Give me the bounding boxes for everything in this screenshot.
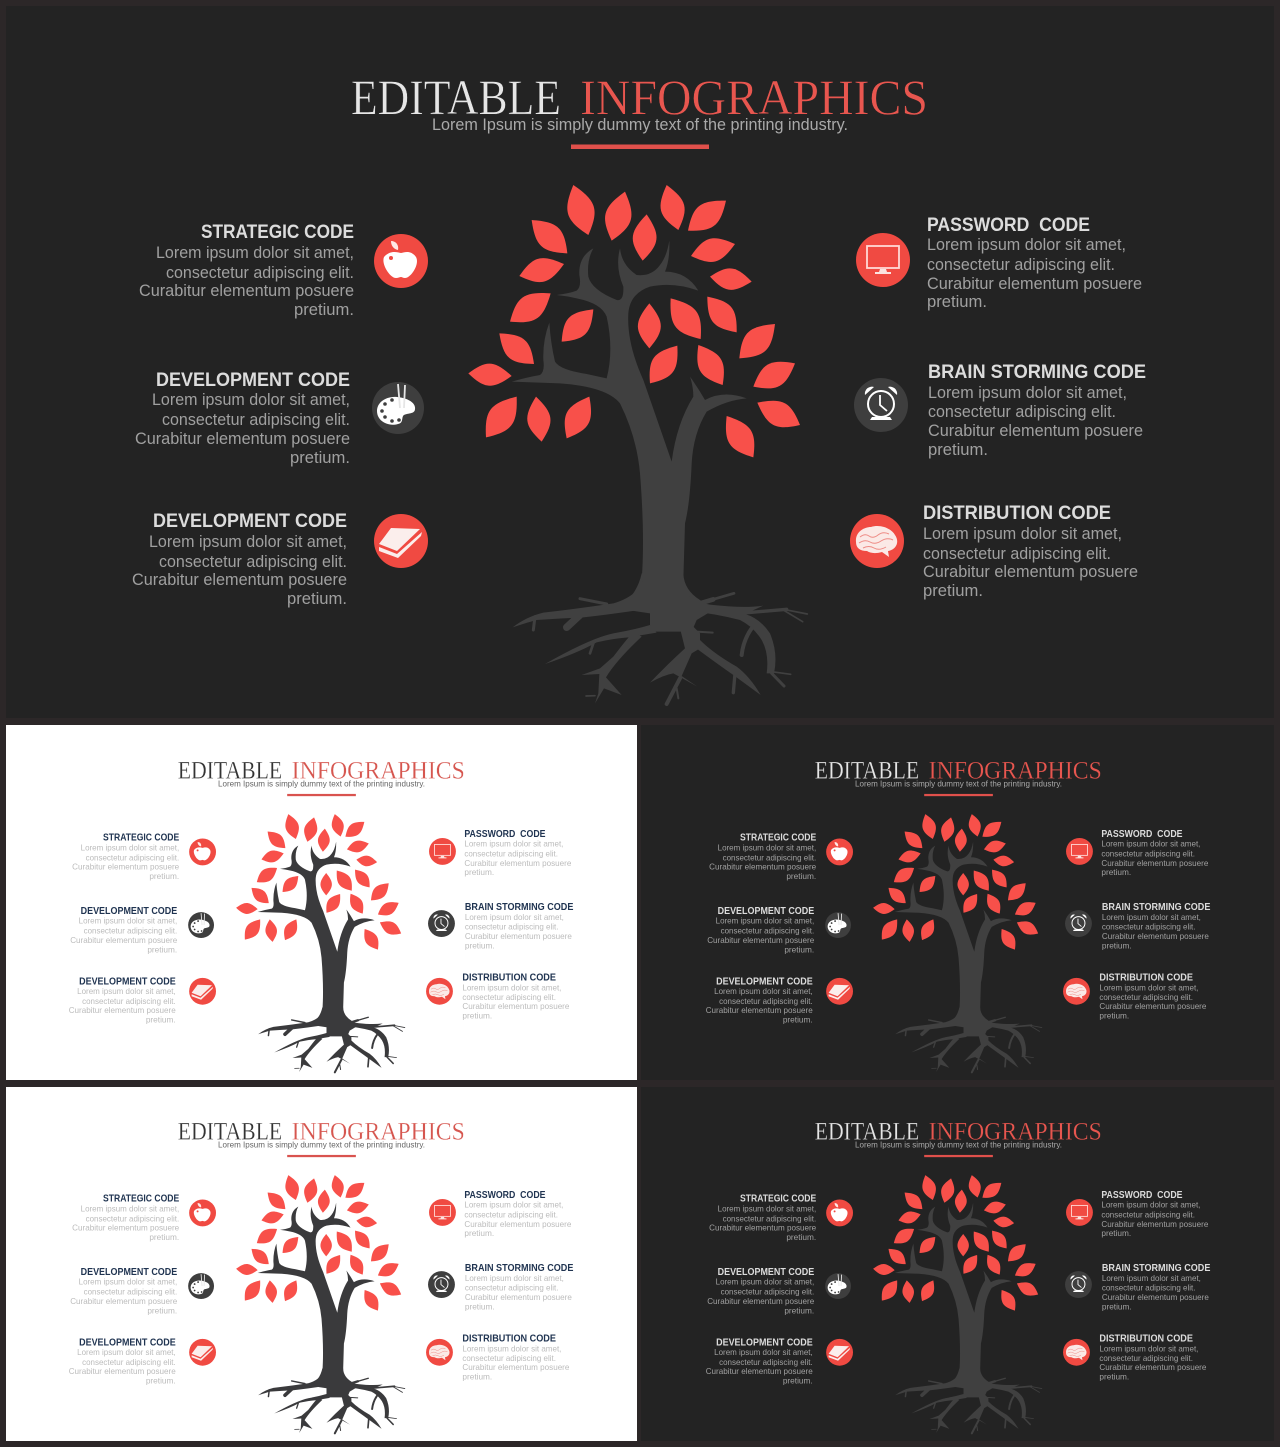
item: development code xyxy=(70,906,214,954)
item: development code: Lorem ipsum dolor sit amet, xyxy=(77,986,176,996)
item: brain storming code xyxy=(1065,902,1211,950)
icon: brain xyxy=(1063,1339,1090,1366)
item: distribution code xyxy=(850,502,1138,600)
item: distribution code: pretium. xyxy=(1099,1372,1129,1382)
item: development code: consectetur adipiscing elit. xyxy=(84,1287,177,1297)
icon: monitor xyxy=(1066,838,1093,865)
item: password code: consectetur adipiscing elit. xyxy=(1101,848,1195,858)
item: strategic code: consectetur adipiscing elit. xyxy=(86,852,179,862)
item: password code xyxy=(856,214,1142,311)
item: strategic code: Lorem ipsum dolor sit amet, xyxy=(718,1203,816,1213)
item: development code: consectetur adipiscing elit. xyxy=(84,926,177,936)
item: development code xyxy=(135,369,424,467)
item: brain storming code: Lorem ipsum dolor sit amet, xyxy=(928,383,1127,402)
item: development code: pretium. xyxy=(784,1305,814,1315)
item: brain storming code xyxy=(428,1263,574,1311)
item: development code: DEVELOPMENT CODE xyxy=(716,976,813,987)
item: strategic code: pretium. xyxy=(294,300,354,319)
item: strategic code: Curabitur elementum posuere xyxy=(709,1222,816,1232)
item: password code: Curabitur elementum posuere xyxy=(464,1219,572,1229)
item: distribution code: pretium. xyxy=(462,1372,492,1382)
item: strategic code xyxy=(72,832,216,881)
item: development code: DEVELOPMENT CODE xyxy=(79,976,176,987)
title: INFOGRAPHICS xyxy=(292,1119,465,1146)
item: password code: Curabitur elementum posuere xyxy=(927,274,1142,293)
item: distribution code xyxy=(426,972,570,1021)
icon: apple xyxy=(374,234,428,288)
title xyxy=(351,69,928,125)
item: development code xyxy=(706,976,853,1025)
item: development code: Lorem ipsum dolor sit amet, xyxy=(714,986,813,996)
item: development code: Lorem ipsum dolor sit amet, xyxy=(79,1277,177,1287)
item: development code: Lorem ipsum dolor sit amet, xyxy=(79,916,177,926)
item: distribution code: pretium. xyxy=(462,1011,492,1021)
icon: apple xyxy=(189,1199,216,1226)
item: password code: PASSWORD CODE xyxy=(464,829,546,840)
item: development code: Curabitur elementum posuere xyxy=(70,935,177,945)
item: password code: consectetur adipiscing elit. xyxy=(927,255,1115,274)
item: development code: consectetur adipiscing elit. xyxy=(82,996,176,1006)
item: brain storming code: consectetur adipiscing elit. xyxy=(1102,1283,1195,1293)
item: distribution code: Lorem ipsum dolor sit amet, xyxy=(1099,1343,1198,1353)
item: password code: Lorem ipsum dolor sit amet, xyxy=(927,235,1126,254)
item: strategic code: Curabitur elementum posuere xyxy=(139,281,354,300)
item: distribution code: DISTRIBUTION CODE xyxy=(462,1333,556,1344)
item: development code: Lorem ipsum dolor sit amet, xyxy=(149,532,347,551)
item: development code: consectetur adipiscing elit. xyxy=(721,926,814,936)
item: strategic code: Curabitur elementum posuere xyxy=(72,1222,179,1232)
tree illustration xyxy=(873,1173,1042,1433)
item: development code xyxy=(69,976,216,1025)
item: brain storming code: BRAIN STORMING CODE xyxy=(465,1263,574,1274)
item: development code: DEVELOPMENT CODE xyxy=(153,510,347,532)
title underline xyxy=(924,794,993,796)
item: distribution code xyxy=(1063,972,1207,1021)
item: password code: Curabitur elementum posuere xyxy=(1101,858,1209,868)
item: development code: consectetur adipiscing elit. xyxy=(162,410,350,429)
tree illustration xyxy=(468,181,807,704)
item: development code: Curabitur elementum posuere xyxy=(70,1296,177,1306)
item: development code xyxy=(707,1267,851,1315)
item: development code: consectetur adipiscing elit. xyxy=(719,996,813,1006)
icon: palette xyxy=(188,1273,214,1299)
item: strategic code: pretium. xyxy=(786,871,816,881)
subtitle: Lorem Ipsum is simply dummy text of the printing industry. xyxy=(218,1140,425,1150)
item: brain storming code: Curabitur elementum posuere xyxy=(465,1292,572,1302)
title: EDITABLE xyxy=(815,1119,919,1146)
item: brain storming code: pretium. xyxy=(928,440,988,459)
item: strategic code xyxy=(709,1193,853,1242)
item: password code: Curabitur elementum posuere xyxy=(464,858,572,868)
item: development code: pretium. xyxy=(783,1015,813,1025)
item: development code: DEVELOPMENT CODE xyxy=(81,906,178,917)
title: INFOGRAPHICS xyxy=(292,758,465,785)
item: development code: Curabitur elementum posuere xyxy=(132,570,347,589)
subtitle: Lorem Ipsum is simply dummy text of the printing industry. xyxy=(432,115,848,134)
icon: brain xyxy=(1063,978,1090,1005)
item: development code: consectetur adipiscing elit. xyxy=(82,1357,176,1367)
item: brain storming code: BRAIN STORMING CODE xyxy=(1102,902,1211,913)
item: password code: Lorem ipsum dolor sit amet, xyxy=(1101,1199,1200,1209)
item: distribution code: consectetur adipiscing elit. xyxy=(923,544,1111,563)
item: development code: DEVELOPMENT CODE xyxy=(79,1337,176,1348)
item: brain storming code: Lorem ipsum dolor sit amet, xyxy=(465,1273,564,1283)
item: distribution code: Curabitur elementum posuere xyxy=(462,1001,570,1011)
title xyxy=(178,758,465,785)
item: password code: pretium. xyxy=(464,867,494,877)
title underline xyxy=(924,1155,993,1157)
icon: brain xyxy=(426,1339,453,1366)
icon: book xyxy=(189,978,216,1005)
item: distribution code: Lorem ipsum dolor sit amet, xyxy=(923,524,1122,543)
item: strategic code: Lorem ipsum dolor sit amet, xyxy=(718,842,816,852)
item: development code: Curabitur elementum posuere xyxy=(707,935,814,945)
icon: book xyxy=(374,514,428,568)
item: brain storming code xyxy=(854,361,1146,459)
item: brain storming code: Curabitur elementum posuere xyxy=(1102,1292,1209,1302)
item: development code: Curabitur elementum posuere xyxy=(135,429,350,448)
item: strategic code: consectetur adipiscing elit. xyxy=(86,1213,179,1223)
item: development code: DEVELOPMENT CODE xyxy=(156,369,350,391)
icon: book xyxy=(189,1339,216,1366)
item: password code: Curabitur elementum posuere xyxy=(1101,1219,1209,1229)
panel: main dark slide xyxy=(132,69,1146,704)
item: brain storming code: pretium. xyxy=(1102,940,1132,950)
title: INFOGRAPHICS xyxy=(580,69,928,125)
item: password code: consectetur adipiscing elit. xyxy=(1101,1209,1195,1219)
title xyxy=(815,758,1102,785)
item: strategic code: pretium. xyxy=(149,1232,179,1242)
item: strategic code: STRATEGIC CODE xyxy=(103,832,180,843)
item: password code: consectetur adipiscing elit. xyxy=(464,848,558,858)
item: distribution code: consectetur adipiscing elit. xyxy=(462,992,556,1002)
item: brain storming code: BRAIN STORMING CODE xyxy=(928,361,1146,383)
item: brain storming code: Lorem ipsum dolor sit amet, xyxy=(1102,912,1201,922)
item: password code: Lorem ipsum dolor sit amet, xyxy=(464,1199,563,1209)
subtitle: Lorem Ipsum is simply dummy text of the printing industry. xyxy=(218,779,425,789)
item: password code: pretium. xyxy=(1101,867,1131,877)
item: password code xyxy=(1066,829,1209,877)
subtitle: Lorem Ipsum is simply dummy text of the printing industry. xyxy=(855,779,1062,789)
item: strategic code xyxy=(139,221,428,319)
item: development code: DEVELOPMENT CODE xyxy=(81,1267,178,1278)
item: strategic code: Lorem ipsum dolor sit amet, xyxy=(156,243,354,262)
item: password code: PASSWORD CODE xyxy=(927,214,1090,236)
item: distribution code: Lorem ipsum dolor sit amet, xyxy=(1099,982,1198,992)
icon: monitor xyxy=(429,838,456,865)
title xyxy=(178,1119,465,1146)
item: distribution code: DISTRIBUTION CODE xyxy=(462,972,556,983)
item: strategic code: consectetur adipiscing elit. xyxy=(723,1213,816,1223)
item: distribution code: Lorem ipsum dolor sit amet, xyxy=(462,1343,561,1353)
item: password code: Lorem ipsum dolor sit amet, xyxy=(1101,838,1200,848)
title underline xyxy=(571,144,709,149)
tree illustration xyxy=(236,812,405,1072)
item: development code: pretium. xyxy=(287,589,347,608)
item: password code: PASSWORD CODE xyxy=(1101,829,1183,840)
item: brain storming code: consectetur adipiscing elit. xyxy=(928,402,1116,421)
item: development code: Curabitur elementum posuere xyxy=(69,1005,176,1015)
item: password code: Lorem ipsum dolor sit amet, xyxy=(464,838,563,848)
icon: palette xyxy=(188,912,214,938)
item: brain storming code xyxy=(428,902,574,950)
icon: brain xyxy=(850,514,904,568)
item: brain storming code: pretium. xyxy=(465,1301,495,1311)
panel: white slide 2 background xyxy=(6,1087,637,1441)
panel: dark slide 2 xyxy=(706,1119,1211,1433)
item: development code xyxy=(70,1267,214,1315)
item: strategic code: consectetur adipiscing elit. xyxy=(166,263,354,282)
item: strategic code: STRATEGIC CODE xyxy=(201,221,354,243)
item: development code: DEVELOPMENT CODE xyxy=(718,1267,815,1278)
panel: main dark slide background xyxy=(6,6,1274,718)
item: development code xyxy=(707,906,851,954)
title: INFOGRAPHICS xyxy=(929,758,1102,785)
item: strategic code: Lorem ipsum dolor sit amet, xyxy=(81,842,179,852)
title: EDITABLE xyxy=(815,758,919,785)
icon: alarm clock xyxy=(428,910,455,937)
item: distribution code: DISTRIBUTION CODE xyxy=(923,502,1111,524)
item: distribution code: Curabitur elementum posuere xyxy=(1099,1001,1207,1011)
item: password code xyxy=(429,829,572,877)
item: strategic code xyxy=(709,832,853,881)
item: password code: consectetur adipiscing elit. xyxy=(464,1209,558,1219)
item: distribution code: Curabitur elementum posuere xyxy=(1099,1362,1207,1372)
item: development code: consectetur adipiscing elit. xyxy=(719,1357,813,1367)
item: brain storming code: pretium. xyxy=(1102,1301,1132,1311)
item: brain storming code: pretium. xyxy=(465,940,495,950)
item: password code: PASSWORD CODE xyxy=(1101,1190,1183,1201)
icon: alarm clock xyxy=(1065,910,1092,937)
subtitle: Lorem Ipsum is simply dummy text of the printing industry. xyxy=(855,1140,1062,1150)
item: development code: pretium. xyxy=(784,944,814,954)
icon: apple xyxy=(826,838,853,865)
item: development code xyxy=(706,1337,853,1386)
item: strategic code: Curabitur elementum posuere xyxy=(709,861,816,871)
item: development code: Lorem ipsum dolor sit amet, xyxy=(714,1347,813,1357)
panel: dark slide 1 background xyxy=(641,725,1274,1080)
title: INFOGRAPHICS xyxy=(929,1119,1102,1146)
item: brain storming code: Lorem ipsum dolor sit amet, xyxy=(465,912,564,922)
item: strategic code: Lorem ipsum dolor sit amet, xyxy=(81,1203,179,1213)
item: strategic code: consectetur adipiscing elit. xyxy=(723,852,816,862)
item: distribution code: Curabitur elementum posuere xyxy=(462,1362,570,1372)
panel: white slide 1 xyxy=(69,758,574,1072)
icon: alarm clock xyxy=(1065,1271,1092,1298)
item: development code: DEVELOPMENT CODE xyxy=(718,906,815,917)
item: development code: pretium. xyxy=(147,944,177,954)
item: distribution code: pretium. xyxy=(923,581,983,600)
icon: apple xyxy=(189,838,216,865)
item: distribution code: consectetur adipiscing elit. xyxy=(1099,992,1193,1002)
tree illustration xyxy=(873,812,1042,1072)
title underline xyxy=(287,794,356,796)
item: development code: pretium. xyxy=(146,1015,176,1025)
item: development code: Lorem ipsum dolor sit amet, xyxy=(77,1347,176,1357)
item: strategic code: Curabitur elementum posuere xyxy=(72,861,179,871)
panel: white slide 1 background xyxy=(6,725,637,1080)
item: development code: Curabitur elementum posuere xyxy=(69,1366,176,1376)
item: strategic code: STRATEGIC CODE xyxy=(740,1193,817,1204)
item: strategic code: STRATEGIC CODE xyxy=(740,832,817,843)
item: development code: pretium. xyxy=(290,448,350,467)
item: brain storming code: consectetur adipiscing elit. xyxy=(465,1283,558,1293)
item: development code: Lorem ipsum dolor sit amet, xyxy=(716,1277,814,1287)
item: development code xyxy=(132,510,428,608)
item: password code: pretium. xyxy=(464,1228,494,1238)
item: password code: PASSWORD CODE xyxy=(464,1190,546,1201)
item: distribution code: DISTRIBUTION CODE xyxy=(1099,972,1193,983)
item: brain storming code xyxy=(1065,1263,1211,1311)
icon: palette xyxy=(825,1273,851,1299)
item: distribution code xyxy=(426,1333,570,1382)
item: development code: pretium. xyxy=(146,1376,176,1386)
title: EDITABLE xyxy=(351,69,561,125)
item: distribution code: Lorem ipsum dolor sit amet, xyxy=(462,982,561,992)
item: brain storming code: consectetur adipiscing elit. xyxy=(465,922,558,932)
icon: book xyxy=(826,1339,853,1366)
icon: monitor xyxy=(856,233,910,287)
item: development code: pretium. xyxy=(147,1305,177,1315)
item: strategic code: STRATEGIC CODE xyxy=(103,1193,180,1204)
panel: white slide 2 xyxy=(69,1119,574,1433)
item: development code: Curabitur elementum posuere xyxy=(707,1296,814,1306)
item: brain storming code: BRAIN STORMING CODE xyxy=(465,902,574,913)
item: password code: pretium. xyxy=(927,292,987,311)
item: brain storming code: Curabitur elementum posuere xyxy=(928,421,1143,440)
title underline xyxy=(287,1155,356,1157)
item: brain storming code: Lorem ipsum dolor sit amet, xyxy=(1102,1273,1201,1283)
item: distribution code: consectetur adipiscing elit. xyxy=(1099,1353,1193,1363)
icon: monitor xyxy=(429,1199,456,1226)
item: brain storming code: consectetur adipiscing elit. xyxy=(1102,922,1195,932)
item: password code xyxy=(429,1190,572,1238)
icon: palette xyxy=(372,382,424,434)
icon: book xyxy=(826,978,853,1005)
item: strategic code: pretium. xyxy=(786,1232,816,1242)
item: distribution code xyxy=(1063,1333,1207,1382)
icon: monitor xyxy=(1066,1199,1093,1226)
item: development code: DEVELOPMENT CODE xyxy=(716,1337,813,1348)
icon: palette xyxy=(825,912,851,938)
item: development code: pretium. xyxy=(783,1376,813,1386)
item: password code xyxy=(1066,1190,1209,1238)
item: distribution code: consectetur adipiscing elit. xyxy=(462,1353,556,1363)
item: distribution code: DISTRIBUTION CODE xyxy=(1099,1333,1193,1344)
item: strategic code xyxy=(72,1193,216,1242)
item: development code: consectetur adipiscing elit. xyxy=(159,552,347,571)
icon: alarm clock xyxy=(428,1271,455,1298)
item: development code xyxy=(69,1337,216,1386)
panel: dark slide 1 xyxy=(706,758,1211,1072)
item: development code: Curabitur elementum posuere xyxy=(706,1005,813,1015)
icon: alarm clock xyxy=(854,378,908,432)
icon: brain xyxy=(426,978,453,1005)
icon: apple xyxy=(826,1199,853,1226)
item: development code: Curabitur elementum posuere xyxy=(706,1366,813,1376)
title: EDITABLE xyxy=(178,1119,282,1146)
item: brain storming code: Curabitur elementum posuere xyxy=(465,931,572,941)
item: brain storming code: Curabitur elementum posuere xyxy=(1102,931,1209,941)
panel: dark slide 2 background xyxy=(641,1087,1274,1441)
item: development code: Lorem ipsum dolor sit amet, xyxy=(152,390,350,409)
tree illustration xyxy=(236,1173,405,1433)
title: EDITABLE xyxy=(178,758,282,785)
item: distribution code: Curabitur elementum posuere xyxy=(923,562,1138,581)
item: distribution code: pretium. xyxy=(1099,1011,1129,1021)
item: development code: consectetur adipiscing elit. xyxy=(721,1287,814,1297)
item: password code: pretium. xyxy=(1101,1228,1131,1238)
title xyxy=(815,1119,1102,1146)
item: brain storming code: BRAIN STORMING CODE xyxy=(1102,1263,1211,1274)
item: strategic code: pretium. xyxy=(149,871,179,881)
item: development code: Lorem ipsum dolor sit amet, xyxy=(716,916,814,926)
